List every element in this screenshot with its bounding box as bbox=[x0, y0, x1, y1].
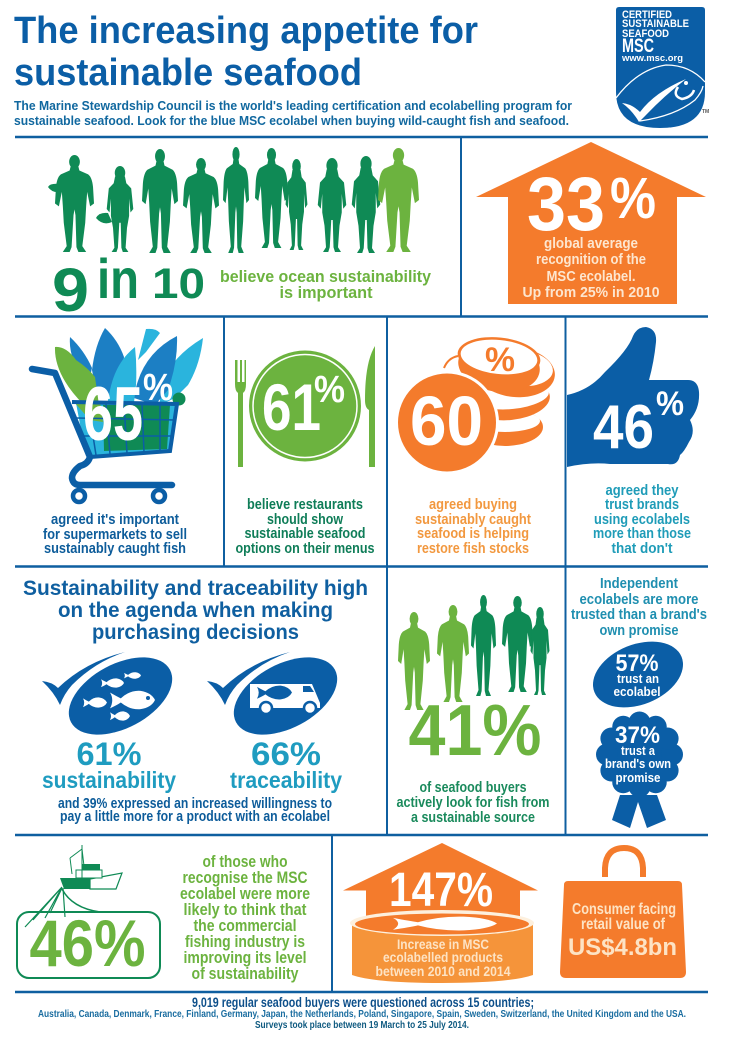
caption: is important bbox=[280, 284, 373, 302]
panel: retail value bag bbox=[560, 848, 686, 978]
caption bbox=[58, 796, 332, 825]
icon: crowd of people bbox=[48, 147, 419, 253]
panel: 33% recognition arrow: Up from 25% in 2010 bbox=[522, 285, 660, 301]
caption: ecolabelled products bbox=[383, 949, 503, 965]
caption: pay a little more for a product with an ecolabel bbox=[60, 809, 330, 825]
icon: thumbs up bbox=[567, 327, 699, 467]
heading: ecolabels are more bbox=[580, 592, 698, 608]
statistic: 147%: 147% bbox=[389, 864, 493, 917]
MSC logo: MSC bbox=[622, 36, 654, 57]
caption: and 39% expressed an increased willingness to bbox=[58, 796, 332, 812]
panel: 33% recognition arrow: MSC ecolabel. bbox=[546, 269, 636, 285]
statistic: 60%: 60 bbox=[410, 382, 483, 460]
footer: survey notes: Surveys took place between 19 March to 25 July 2014. bbox=[255, 1020, 469, 1031]
statistic: 9 in 10: 9 bbox=[52, 256, 89, 324]
footer: survey notes: 9,019 regular seafood buyers were questioned across 15 countries; bbox=[192, 994, 534, 1010]
icon: plate with fork and knife bbox=[235, 346, 375, 467]
caption: for supermarkets to sell bbox=[43, 527, 187, 543]
badge: 37% rosette: brand's own bbox=[605, 756, 671, 771]
caption bbox=[236, 497, 374, 557]
statistic: 65%: 65 bbox=[83, 372, 143, 457]
caption: more than those bbox=[593, 526, 691, 542]
panel: 33% recognition arrow: % bbox=[610, 166, 656, 231]
caption: improving its level bbox=[184, 948, 306, 967]
panel: 60% fish stocks bbox=[395, 333, 557, 557]
badge: 37% rosette: trust a bbox=[621, 743, 656, 758]
badge: 37% rosette bbox=[596, 712, 683, 828]
statistic: 41%: 41% bbox=[408, 691, 542, 771]
caption: trust brands bbox=[605, 497, 679, 513]
caption: the commercial bbox=[194, 916, 296, 935]
caption: sustainably caught bbox=[415, 512, 531, 528]
statistic: 66% traceability: 66% bbox=[251, 736, 321, 772]
caption bbox=[43, 512, 187, 557]
panel: 60% fish stocks: % bbox=[485, 341, 515, 379]
heading bbox=[23, 577, 368, 644]
title bbox=[14, 10, 478, 94]
heading: Independent bbox=[600, 576, 678, 592]
panel: 46% trust brands bbox=[567, 327, 699, 557]
caption: agreed it's important bbox=[51, 512, 179, 528]
statistic: 9 in 10 bbox=[52, 247, 205, 324]
intro text bbox=[14, 98, 572, 128]
caption: between 2010 and 2014 bbox=[376, 963, 511, 979]
panel: 41% of seafood buyers bbox=[396, 595, 550, 826]
text: retail value: US$4.8bn bbox=[568, 934, 677, 961]
statistic: 61% sustainability: 61% bbox=[76, 736, 142, 772]
MSC logo: CERTIFIED bbox=[622, 9, 672, 21]
intro text: sustainable seafood. Look for the blue MSC ecolabel when buying wild-caught fish and seafood. bbox=[14, 113, 569, 128]
caption: options on their menus bbox=[236, 541, 374, 557]
caption: should show bbox=[267, 512, 344, 528]
panel: 33% recognition arrow: global average bbox=[544, 236, 638, 252]
panel: 9 in 10 bbox=[48, 147, 432, 324]
caption: believe ocean sustainability bbox=[220, 268, 432, 286]
caption: Increase in MSC bbox=[397, 936, 489, 952]
panel: 33% recognition arrow: recognition of the bbox=[536, 252, 646, 268]
icon: tick with van bbox=[207, 641, 350, 751]
caption bbox=[376, 936, 511, 979]
caption: agreed they bbox=[606, 483, 678, 499]
badge: 37% rosette: 37% bbox=[615, 722, 660, 749]
panel: sustainability and traceability bbox=[23, 577, 368, 825]
heading bbox=[571, 576, 707, 639]
caption: believe restaurants bbox=[247, 497, 363, 513]
caption: of those who bbox=[202, 852, 288, 871]
panel: 33% recognition arrow: 33 bbox=[527, 162, 605, 247]
caption: fishing industry is bbox=[185, 932, 305, 951]
caption: sustainably caught fish bbox=[44, 541, 186, 557]
panel: 65% supermarkets bbox=[32, 328, 203, 557]
panel: 147% product increase bbox=[343, 843, 538, 983]
icon: tin with fish bbox=[350, 910, 534, 983]
badge: 37% rosette: promise bbox=[616, 770, 660, 785]
caption: likely to think that bbox=[184, 900, 307, 919]
statistic: 9 in 10: in bbox=[97, 247, 139, 310]
text: retail value: retail value of bbox=[581, 916, 666, 933]
caption: of seafood buyers bbox=[420, 780, 526, 796]
caption: seafood is helping bbox=[417, 526, 529, 542]
MSC logo: SEAFOOD bbox=[622, 28, 669, 40]
icon: shopping cart with fish bbox=[32, 328, 203, 502]
panel: 46% commercial fishing bbox=[17, 845, 310, 983]
caption: restore fish stocks bbox=[417, 541, 529, 557]
badge: 57% trust an ecolabel bbox=[583, 629, 693, 720]
heading: Sustainability and traceability high bbox=[23, 577, 368, 600]
icon: fishing boat and net bbox=[17, 845, 160, 978]
statistic: 61%: 61 bbox=[262, 370, 321, 444]
statistic: 46%: % bbox=[656, 385, 684, 423]
statistic: 46%: 46% bbox=[30, 906, 146, 980]
footer: survey notes bbox=[38, 994, 686, 1031]
caption: of sustainability bbox=[192, 964, 299, 983]
caption bbox=[180, 852, 310, 983]
statistic: 46% bbox=[593, 385, 684, 462]
text: retail value: Consumer facing bbox=[572, 901, 676, 918]
caption: a sustainable source bbox=[411, 810, 535, 826]
arrow bbox=[343, 843, 538, 925]
statistic: 61%: % bbox=[314, 369, 345, 411]
heading: purchasing decisions bbox=[92, 621, 299, 644]
statistic: 46%: 46 bbox=[593, 393, 654, 462]
statistic: 9 in 10: 10 bbox=[152, 260, 205, 308]
MSC logo: TM bbox=[702, 109, 709, 115]
MSC logo bbox=[616, 7, 709, 128]
caption: ecolabel were more bbox=[180, 884, 310, 903]
panel: 61% restaurants bbox=[235, 346, 375, 557]
panel: 33% recognition arrow bbox=[476, 142, 706, 304]
caption: agreed buying bbox=[429, 497, 517, 513]
caption: recognise the MSC bbox=[182, 868, 308, 887]
caption: that don't bbox=[612, 541, 673, 557]
caption bbox=[220, 268, 432, 302]
caption: sustainable seafood bbox=[244, 526, 366, 542]
caption: using ecolabels bbox=[594, 512, 690, 528]
MSC logo: www.msc.org bbox=[621, 53, 683, 64]
badge: 57% trust an ecolabel: 57% bbox=[616, 650, 658, 677]
caption bbox=[593, 483, 691, 557]
heading: trusted than a brand's bbox=[571, 607, 707, 623]
statistic: 61% sustainability: sustainability bbox=[42, 767, 176, 793]
badge: 57% trust an ecolabel: ecolabel bbox=[614, 684, 660, 699]
statistic: 61% sustainability bbox=[42, 736, 176, 793]
panel: independent ecolabels bbox=[571, 576, 707, 828]
badge: 57% trust an ecolabel: trust an bbox=[617, 671, 659, 686]
icon: tick with fish bbox=[42, 641, 185, 751]
statistic: 65%: % bbox=[143, 367, 173, 409]
caption: actively look for fish from bbox=[396, 795, 550, 811]
title: The increasing appetite for bbox=[14, 10, 478, 52]
icon: shopping bag bbox=[560, 848, 686, 978]
icon: stack of coins bbox=[395, 333, 557, 474]
statistic: 66% traceability bbox=[230, 736, 342, 793]
caption bbox=[396, 780, 550, 826]
MSC logo: SUSTAINABLE bbox=[622, 18, 689, 30]
title: sustainable seafood bbox=[14, 52, 362, 94]
icon: five people bbox=[398, 595, 550, 710]
text: retail value bbox=[568, 901, 677, 961]
grid lines bbox=[15, 137, 708, 992]
statistic: 66% traceability: traceability bbox=[230, 767, 342, 793]
heading: on the agenda when making bbox=[58, 599, 333, 622]
caption bbox=[415, 497, 531, 557]
intro text: The Marine Stewardship Council is the world's leading certification and ecolabelling program for bbox=[14, 98, 572, 113]
heading: own promise bbox=[600, 623, 678, 639]
